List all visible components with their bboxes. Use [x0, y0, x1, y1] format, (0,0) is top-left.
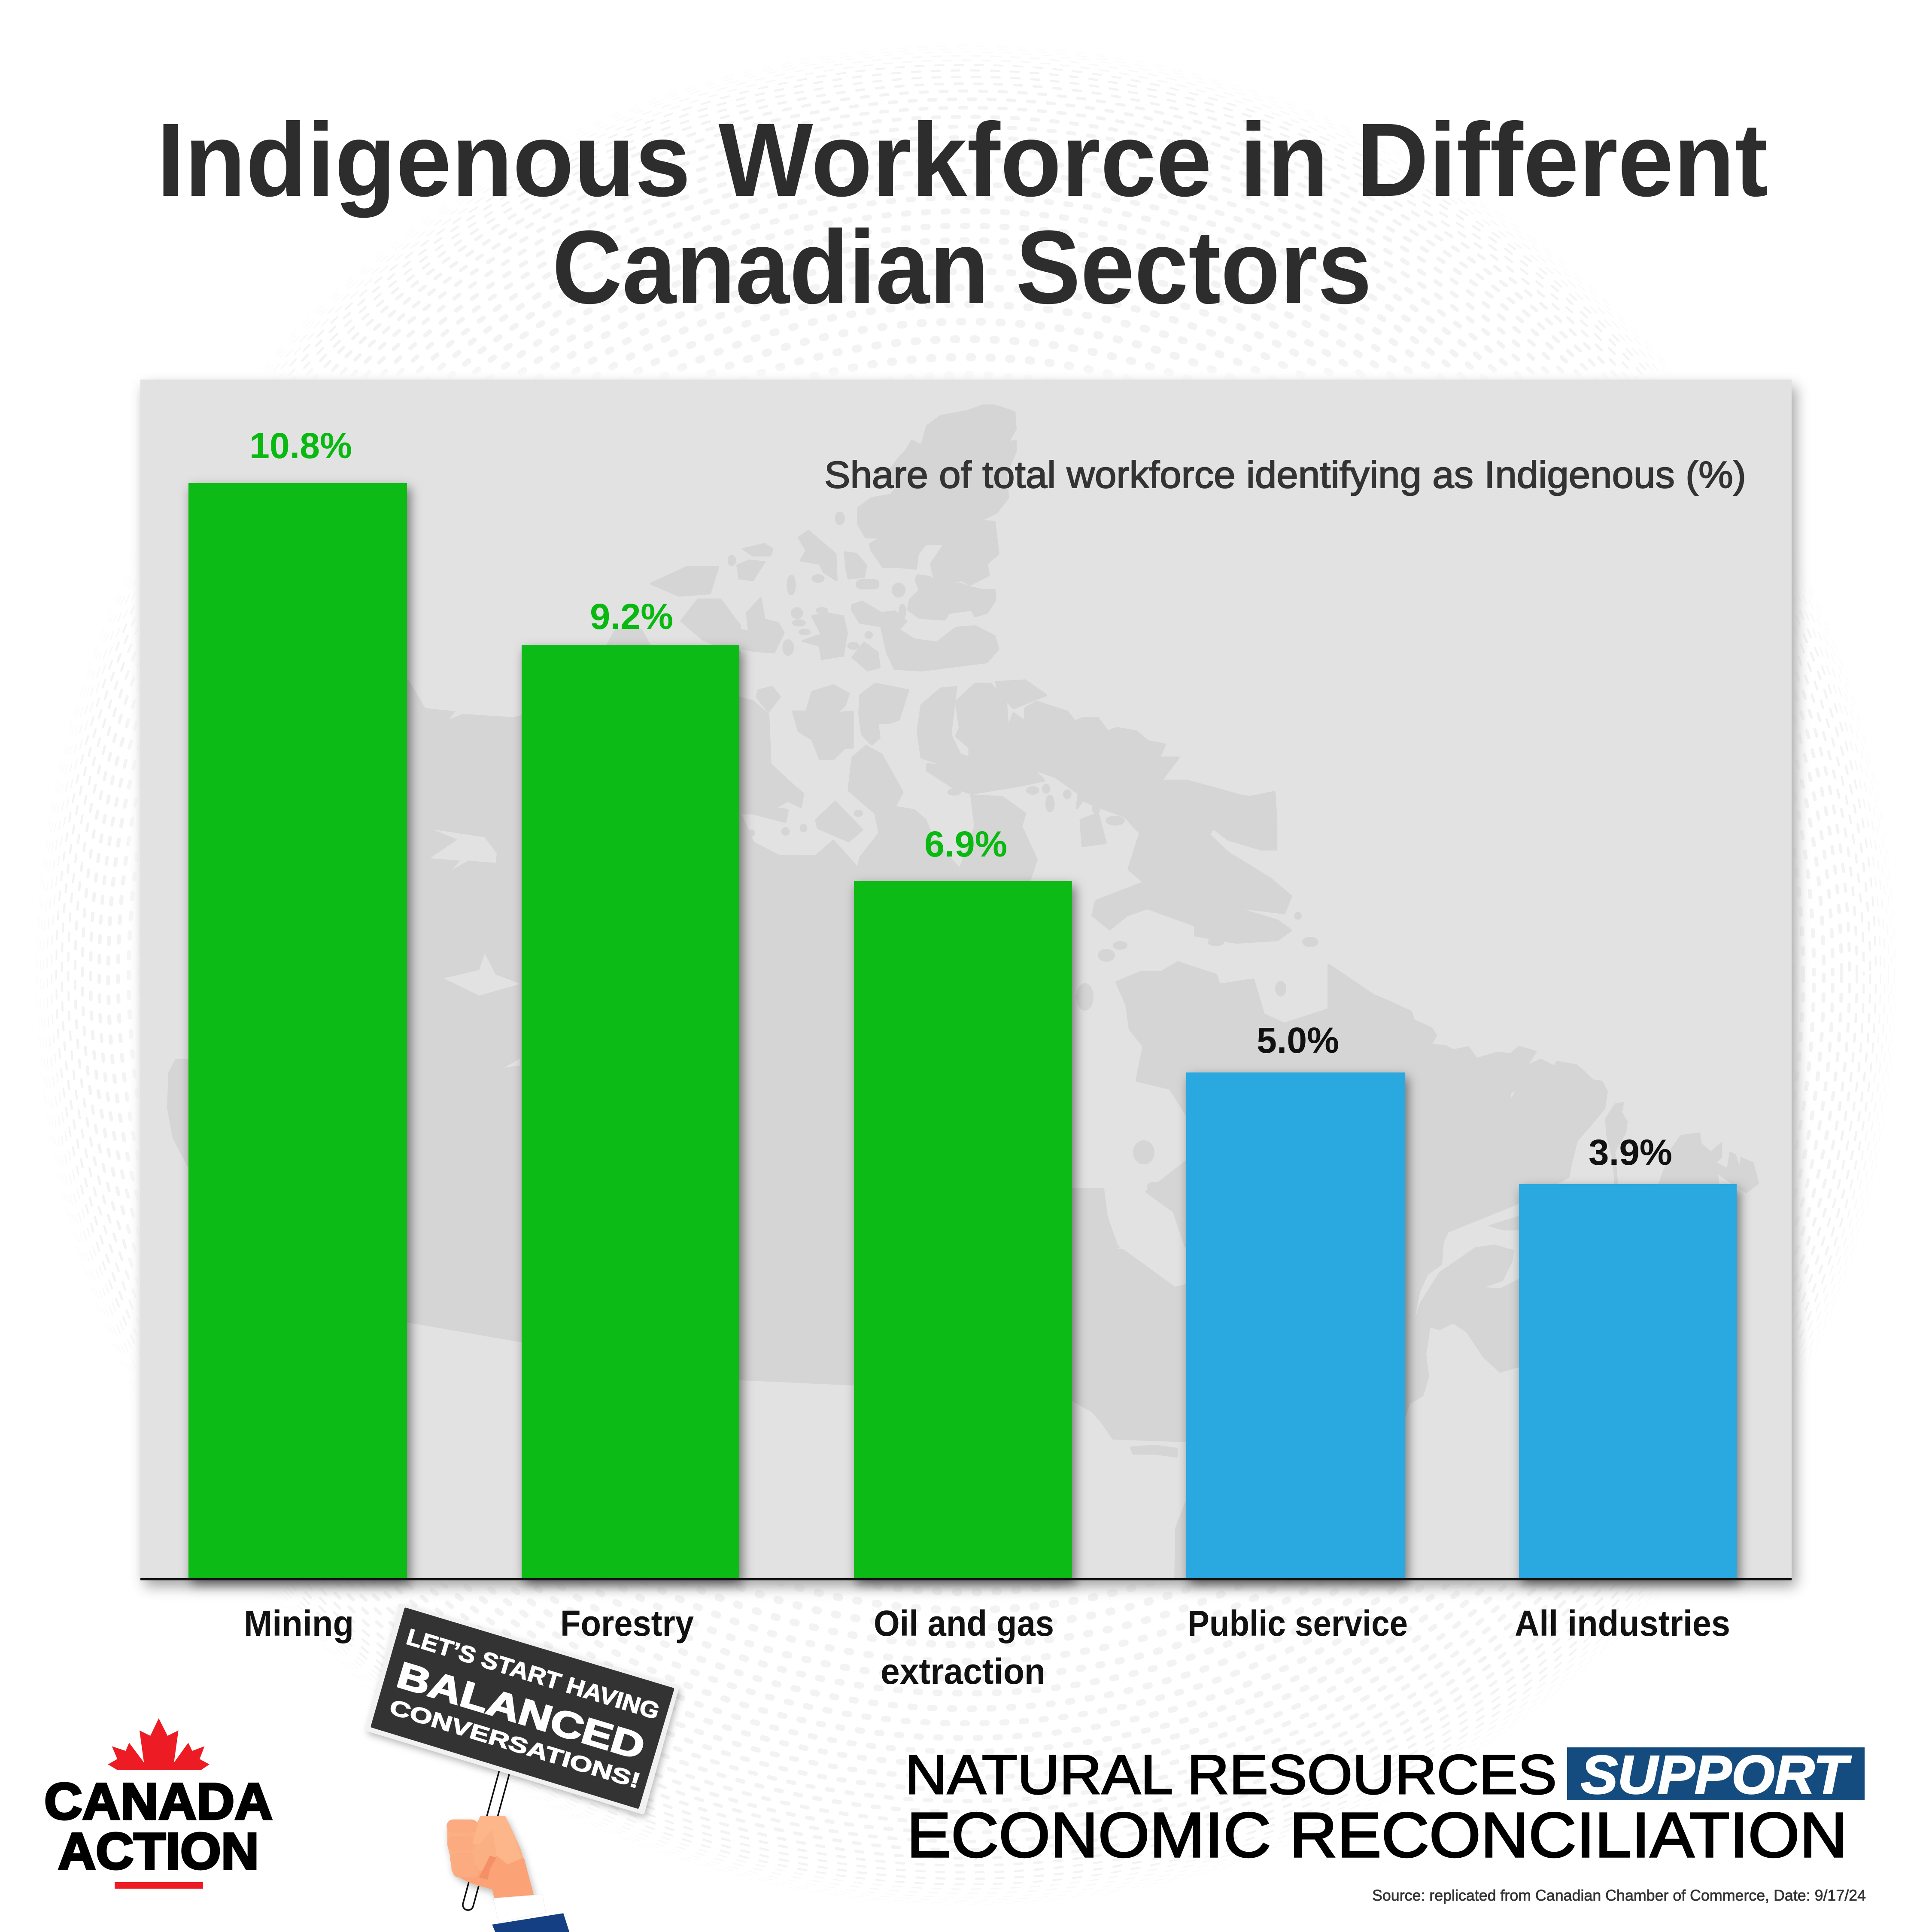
slogan line 2: ECONOMIC RECONCILIATION — [907, 1800, 1847, 1871]
bar: Oil and gas extraction — [854, 881, 1072, 1580]
panel: chart background — [140, 380, 1792, 1580]
icon: maple leaf — [108, 1718, 210, 1770]
logo wordmark — [44, 1773, 273, 1880]
sign board: LET’S START HAVING — [404, 1624, 662, 1725]
icon: hand holding sign — [368, 1605, 677, 1932]
logo wordmark: ACTION — [58, 1823, 259, 1880]
source note: Source: replicated from Canadian Chamber of Commerce, Date: 9/17/24 — [1372, 1886, 1866, 1904]
category labels — [244, 1603, 1730, 1692]
bar: Forestry — [522, 645, 739, 1580]
logo wordmark: CANADA — [44, 1773, 273, 1830]
category labels: Public service — [1188, 1603, 1408, 1643]
category labels: Mining — [244, 1603, 354, 1643]
value labels: 10.8% — [249, 425, 352, 466]
value labels: 9.2% — [590, 596, 673, 637]
value labels: 6.9% — [924, 824, 1007, 864]
logo: Canada Action — [44, 1718, 273, 1889]
bar: Mining — [188, 483, 407, 1580]
value labels: 5.0% — [1257, 1020, 1339, 1060]
title: Canadian Sectors — [552, 209, 1372, 325]
sign board: BALANCED — [392, 1654, 650, 1768]
slogan — [905, 1743, 1865, 1871]
bar chart — [140, 483, 1792, 1580]
bar: All industries — [1519, 1184, 1737, 1580]
shirt cuff — [493, 1895, 546, 1923]
category labels: All industries — [1515, 1603, 1730, 1643]
map of Canada watermark — [168, 405, 1759, 1580]
sign board: CONVERSATIONS! — [387, 1695, 643, 1793]
sign board — [368, 1605, 677, 1813]
title: Indigenous Workforce in Different — [157, 102, 1768, 218]
support badge: SUPPORT — [1581, 1744, 1851, 1805]
logo underline — [115, 1882, 203, 1889]
sign stick — [468, 1770, 505, 1905]
value labels: 3.9% — [1589, 1132, 1672, 1173]
axis baseline — [140, 1578, 1792, 1580]
title — [157, 102, 1768, 325]
value labels — [249, 425, 1672, 1173]
category labels: Oil and gas — [874, 1603, 1054, 1643]
category labels: Forestry — [560, 1603, 694, 1643]
slogan line 1: NATURAL RESOURCES — [905, 1743, 1557, 1806]
jacket sleeve — [492, 1913, 572, 1932]
hand — [447, 1816, 534, 1899]
bar: Public service — [1186, 1072, 1405, 1580]
chart subtitle: Share of total workforce identifying as Indigenous (%) — [824, 453, 1746, 496]
category labels: extraction — [881, 1651, 1045, 1692]
